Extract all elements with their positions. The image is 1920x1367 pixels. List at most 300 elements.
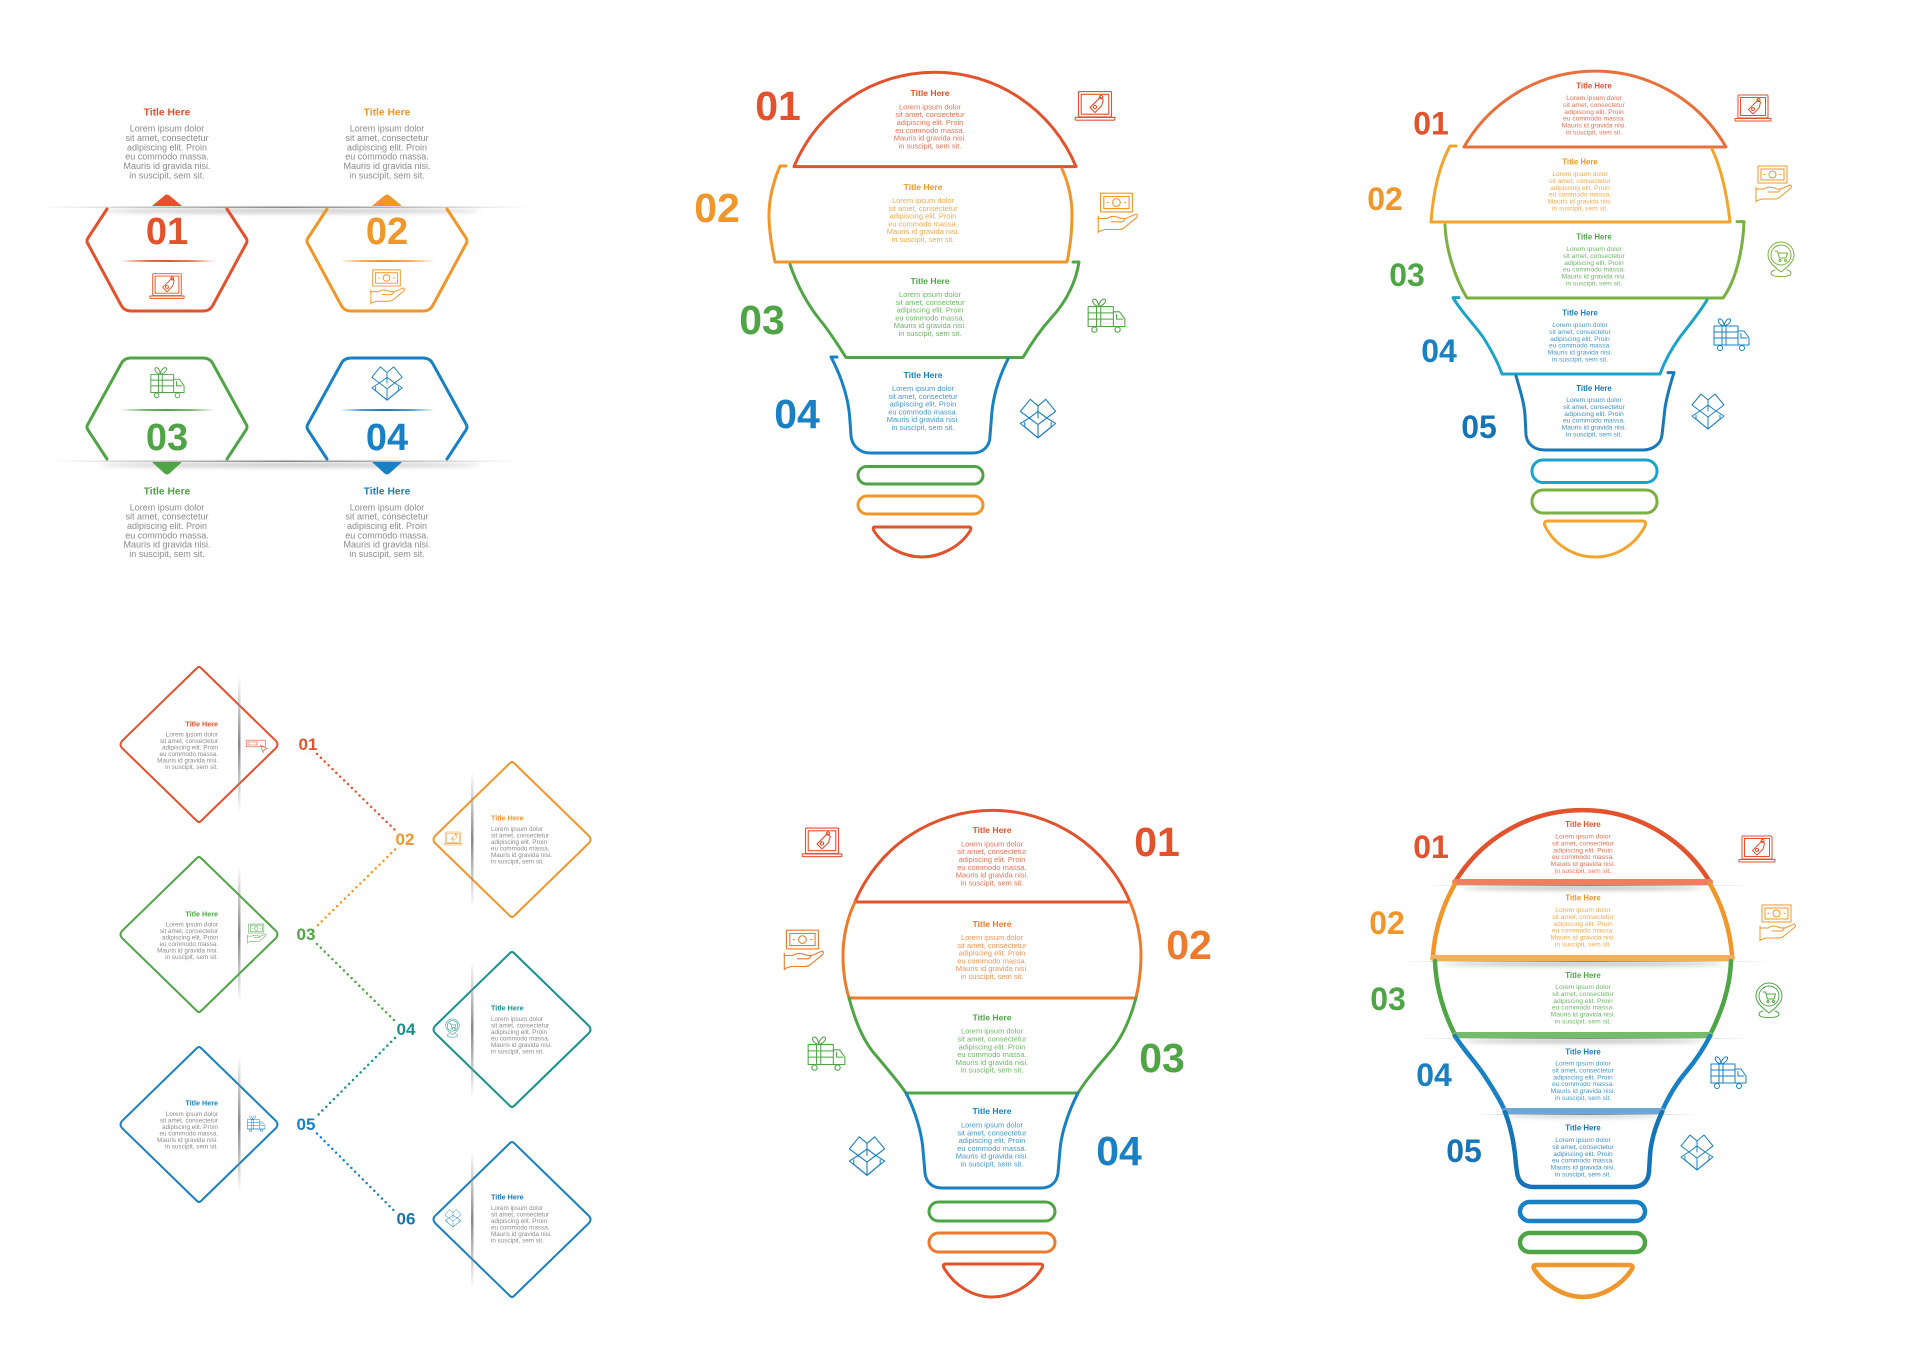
numbers: 05 bbox=[1446, 1133, 1482, 1169]
text block: 03 bbox=[894, 276, 966, 338]
text block: 04: adipiscing elit. Proin bbox=[890, 399, 956, 408]
bulb segment 03 bbox=[1435, 961, 1731, 1035]
text block: hexagon 02: adipiscing elit. Proin bbox=[347, 142, 427, 152]
icons bbox=[1681, 836, 1795, 1170]
text block: 01: Title Here bbox=[972, 825, 1012, 835]
diamond 04 bbox=[434, 952, 590, 1107]
panel: whole light bulb, four steps bbox=[784, 810, 1212, 1297]
text block: 01: in suscipit, sem sit. bbox=[1555, 868, 1611, 874]
text block: 01: in suscipit, sem sit. bbox=[961, 878, 1023, 887]
diamond 04: sit amet, consectetur bbox=[491, 1022, 549, 1029]
numbers: 04 bbox=[1096, 1128, 1142, 1174]
text block: 02: adipiscing elit. Proin bbox=[890, 211, 956, 220]
text block: 03: sit amet, consectetur bbox=[895, 297, 965, 306]
text block: 04: sit amet, consectetur bbox=[1549, 328, 1612, 335]
text block: 01: Lorem ipsum dolor bbox=[1555, 833, 1611, 840]
dotted connector 01-02 bbox=[317, 754, 395, 830]
text block: 05: Title Here bbox=[1576, 384, 1612, 393]
numbers: 03 bbox=[1139, 1035, 1185, 1081]
text block: 03: in suscipit, sem sit. bbox=[961, 1065, 1023, 1074]
text block: 03: Mauris id gravida nisi. bbox=[894, 321, 966, 330]
diamond 03: in suscipit, sem sit. bbox=[165, 954, 218, 960]
text block: 05: eu commodo massa. bbox=[1552, 1157, 1614, 1164]
text block: 03: adipiscing elit. Proin bbox=[897, 305, 963, 314]
bulb base pill: teal bbox=[1532, 460, 1657, 482]
hexagon 02: 02 bbox=[366, 211, 408, 253]
text block: 03: Title Here bbox=[1576, 232, 1612, 242]
icons bbox=[1020, 92, 1137, 438]
diamond 06 bbox=[434, 1142, 590, 1297]
icons bbox=[1692, 95, 1794, 429]
text block: 05: adipiscing elit. Proin bbox=[1564, 410, 1624, 417]
numbers: 03 bbox=[1389, 257, 1425, 293]
bulb tip bbox=[873, 527, 971, 557]
diamond 04: in suscipit, sem sit. bbox=[491, 1048, 544, 1055]
diamond 04: eu commodo massa. bbox=[491, 1035, 550, 1042]
text block: 04: in suscipit, sem sit. bbox=[1552, 356, 1608, 363]
numbers: 01 bbox=[755, 83, 801, 129]
diamond 04: adipiscing elit. Proin bbox=[491, 1028, 547, 1036]
bulb segment 03 bbox=[1445, 222, 1744, 298]
text block: 04: Lorem ipsum dolor bbox=[1555, 1060, 1611, 1067]
bulb segment 01 bbox=[855, 810, 1130, 902]
text block: hexagon 01 bbox=[123, 108, 211, 180]
text block: 02: adipiscing elit. Proin bbox=[1550, 184, 1610, 191]
text block: 04: Mauris id gravida nisi. bbox=[1548, 349, 1612, 356]
text block: 03: Title Here bbox=[972, 1013, 1012, 1023]
bulb segment 05 bbox=[1505, 1112, 1662, 1187]
diamond 05: Title Here bbox=[185, 1098, 218, 1108]
text block: 02: adipiscing elit. Proin bbox=[1553, 920, 1613, 927]
bulb segment 02 bbox=[1431, 146, 1730, 222]
text block: 04: eu commodo massa. bbox=[957, 1143, 1027, 1152]
diamond 06: Title Here bbox=[491, 1192, 524, 1202]
bulb base pill: orange bbox=[929, 1233, 1055, 1252]
text block: 04 bbox=[1548, 308, 1612, 363]
diamond 03 bbox=[120, 857, 278, 1012]
text block: 03: adipiscing elit. Proin bbox=[1564, 259, 1624, 266]
diamond 02: sit amet, consectetur bbox=[491, 832, 549, 839]
text block: 02: Lorem ipsum dolor bbox=[1555, 906, 1611, 914]
text block: hexagon 03: Mauris id gravida nisi. bbox=[123, 540, 211, 550]
dotted connector 05-06 bbox=[317, 1134, 395, 1212]
text block: 03: in suscipit, sem sit. bbox=[1555, 1018, 1611, 1025]
numbers: 05 bbox=[297, 1115, 315, 1134]
text block: 02 bbox=[1551, 894, 1615, 948]
text block: 01: Title Here bbox=[1565, 820, 1601, 829]
text block: 03: adipiscing elit. Proin bbox=[959, 1042, 1025, 1051]
text block: 03: in suscipit, sem sit. bbox=[1566, 280, 1622, 287]
text block: 03: sit amet, consectetur bbox=[1563, 252, 1626, 259]
text block: 03 bbox=[1551, 971, 1615, 1025]
text block: 01 bbox=[1551, 820, 1615, 874]
text block: 01 bbox=[1562, 82, 1626, 136]
numbers bbox=[1369, 829, 1482, 1169]
dotted connector 03-04 bbox=[317, 944, 395, 1021]
text block: 04: Lorem ipsum dolor bbox=[1552, 322, 1608, 328]
diamond 01 bbox=[120, 667, 278, 822]
diamond 02: eu commodo massa. bbox=[491, 845, 550, 852]
numbers: 06 bbox=[397, 1210, 415, 1228]
panel: diamond zigzag bbox=[120, 667, 590, 1297]
text block: 02 bbox=[956, 919, 1028, 980]
bulb segment 01 bbox=[794, 72, 1076, 167]
text block: 05: Mauris id gravida nisi. bbox=[1562, 424, 1626, 431]
text block: 02: Lorem ipsum dolor bbox=[892, 196, 955, 204]
text block: 01: Mauris id gravida nisi. bbox=[894, 133, 966, 142]
numbers: 02 bbox=[1166, 922, 1212, 968]
text block: 04: Lorem ipsum dolor bbox=[892, 384, 955, 392]
text block: 03: eu commodo massa. bbox=[1563, 266, 1625, 273]
text block: 01: Mauris id gravida nisi. bbox=[1551, 861, 1615, 868]
text block: 04: adipiscing elit. Proin bbox=[1553, 1074, 1613, 1081]
text block: 02: in suscipit, sem sit. bbox=[1552, 205, 1608, 212]
text block: 03 bbox=[1562, 232, 1626, 287]
text block: 02: Mauris id gravida nisi. bbox=[956, 964, 1028, 973]
text block: 03 bbox=[956, 1013, 1028, 1074]
hexagon 03: 03 bbox=[146, 417, 188, 459]
numbers: 03 bbox=[1370, 981, 1406, 1017]
text block: 04: Mauris id gravida nisi. bbox=[887, 415, 959, 424]
diamond 02: Lorem ipsum dolor bbox=[491, 826, 543, 832]
text block: 04: Title Here bbox=[1565, 1048, 1601, 1056]
text block: 01: eu commodo massa. bbox=[895, 125, 965, 134]
text block: hexagon 03: adipiscing elit. Proin bbox=[127, 521, 207, 531]
text block: 02: eu commodo massa. bbox=[1552, 927, 1614, 934]
text block: 01: adipiscing elit. Proin bbox=[1553, 847, 1613, 854]
text block: hexagon 03: sit amet, consectetur bbox=[125, 512, 209, 522]
numbers: 04 bbox=[1421, 333, 1457, 369]
text block: 02: sit amet, consectetur bbox=[888, 203, 958, 212]
text block: 04: in suscipit, sem sit. bbox=[892, 422, 954, 432]
numbers bbox=[1367, 106, 1497, 445]
text block: hexagon 04: Lorem ipsum dolor bbox=[350, 502, 424, 512]
text block: 02: in suscipit, sem sit. bbox=[892, 234, 954, 244]
text block: 04: adipiscing elit. Proin bbox=[959, 1136, 1025, 1145]
text block: 03: Mauris id gravida nisi. bbox=[1562, 273, 1626, 280]
numbers: 02 bbox=[396, 830, 414, 849]
text block: 05: sit amet, consectetur bbox=[1563, 403, 1626, 410]
text block: 01: Lorem ipsum dolor bbox=[1566, 94, 1622, 102]
text block: 04: sit amet, consectetur bbox=[957, 1128, 1027, 1137]
numbers: 04 bbox=[1416, 1057, 1452, 1093]
text block: 01: sit amet, consectetur bbox=[895, 110, 965, 119]
bulb segment 05 bbox=[1516, 373, 1674, 450]
text block: 04: in suscipit, sem sit. bbox=[1555, 1094, 1611, 1102]
text block: 05: eu commodo massa. bbox=[1563, 417, 1625, 424]
text block: hexagon 02: Title Here bbox=[364, 108, 411, 118]
text block: hexagon 04: eu commodo massa. bbox=[345, 530, 429, 540]
text block: 03: sit amet, consectetur bbox=[957, 1034, 1027, 1043]
text block: 02: Mauris id gravida nisi. bbox=[1548, 198, 1612, 205]
shadow bands bbox=[1400, 885, 1770, 1118]
text block: 02: Lorem ipsum dolor bbox=[1552, 170, 1608, 178]
bulb tip bbox=[1544, 521, 1646, 557]
text block: 04 bbox=[887, 370, 959, 432]
text block: 05 bbox=[1551, 1124, 1615, 1178]
text block: hexagon 02: eu commodo massa. bbox=[345, 152, 429, 162]
text block: 02 bbox=[887, 182, 959, 244]
text block: 02: in suscipit, sem sit. bbox=[1555, 941, 1611, 948]
text block: hexagon 04: Mauris id gravida nisi. bbox=[343, 540, 431, 550]
text block: 01: in suscipit, sem sit. bbox=[1566, 129, 1622, 136]
bulb segment 01 bbox=[1464, 71, 1726, 147]
text block: 03: in suscipit, sem sit. bbox=[899, 328, 961, 338]
text block: 04: in suscipit, sem sit. bbox=[961, 1159, 1023, 1168]
text block: 04: sit amet, consectetur bbox=[888, 391, 958, 400]
bulb segment 03 bbox=[849, 998, 1136, 1093]
text block: 01: eu commodo massa. bbox=[1563, 115, 1625, 122]
text block: 05: Title Here bbox=[1565, 1124, 1601, 1132]
bulb base pill: green bbox=[929, 1202, 1055, 1221]
text block: 04: Lorem ipsum dolor bbox=[961, 1120, 1024, 1129]
numbers: 03 bbox=[739, 297, 785, 343]
text block: hexagon 03 bbox=[123, 486, 211, 559]
diamond 03: eu commodo massa. bbox=[160, 940, 218, 948]
text block: 02: eu commodo massa. bbox=[888, 219, 958, 228]
text block: 01: sit amet, consectetur bbox=[1552, 840, 1615, 847]
text block: 02: eu commodo massa. bbox=[1549, 191, 1611, 198]
diamond 01: Lorem ipsum dolor bbox=[166, 731, 218, 738]
diamond 06: Lorem ipsum dolor bbox=[491, 1204, 543, 1212]
hexagon 02 bbox=[307, 194, 467, 311]
text block: 05: Mauris id gravida nisi. bbox=[1551, 1164, 1615, 1171]
numbers: 01 bbox=[1134, 819, 1180, 865]
diamond 01: Mauris id gravida nisi. bbox=[157, 757, 218, 764]
text block: 02: Mauris id gravida nisi. bbox=[1551, 934, 1615, 941]
text block: hexagon 01: eu commodo massa. bbox=[125, 152, 209, 162]
text block: 01: adipiscing elit. Proin bbox=[897, 118, 963, 126]
numbers: 03 bbox=[297, 925, 315, 944]
diamond 02: adipiscing elit. Proin bbox=[491, 838, 547, 846]
diamond 06: adipiscing elit. Proin bbox=[491, 1218, 547, 1224]
diamond 02: Title Here bbox=[491, 814, 524, 822]
text block: 03: eu commodo massa. bbox=[895, 313, 965, 322]
text block: 03: sit amet, consectetur bbox=[1552, 990, 1615, 997]
diamond 06: in suscipit, sem sit. bbox=[491, 1237, 544, 1244]
bulb segment 04 bbox=[906, 1093, 1078, 1188]
shadow band: bottom bbox=[50, 460, 520, 468]
diamond 06: eu commodo massa. bbox=[491, 1224, 550, 1231]
text block: 02: eu commodo massa. bbox=[957, 956, 1027, 965]
diamond 03: sit amet, consectetur bbox=[160, 928, 218, 934]
diamond 02: in suscipit, sem sit. bbox=[491, 858, 544, 865]
text block: 05 bbox=[1562, 384, 1626, 438]
text block: 01: Title Here bbox=[910, 88, 950, 98]
text block: 03: adipiscing elit. Proin bbox=[1553, 997, 1613, 1004]
text block: 04: Title Here bbox=[903, 370, 943, 380]
text block: 02: Title Here bbox=[972, 919, 1012, 929]
text block: 02: in suscipit, sem sit. bbox=[961, 972, 1023, 980]
diamond 05: Lorem ipsum dolor bbox=[166, 1110, 218, 1118]
diamond 05: eu commodo massa. bbox=[160, 1130, 218, 1137]
bulb segment 04 bbox=[831, 357, 1008, 453]
panel: hexagon infographic bbox=[40, 108, 530, 559]
diamond 03: Title Here bbox=[185, 910, 218, 918]
bulb base pill: green bbox=[858, 466, 983, 484]
text block: 04: adipiscing elit. Proin bbox=[1550, 335, 1610, 342]
text block: 05: in suscipit, sem sit. bbox=[1566, 431, 1622, 438]
text block: 02: Mauris id gravida nisi. bbox=[887, 227, 959, 236]
text block: 03: Mauris id gravida nisi. bbox=[1551, 1011, 1615, 1018]
text block: 05: in suscipit, sem sit. bbox=[1555, 1171, 1611, 1178]
text block: 03: Lorem ipsum dolor bbox=[961, 1026, 1024, 1035]
numbers bbox=[297, 735, 416, 1228]
text block: 01: Mauris id gravida nisi. bbox=[1562, 122, 1626, 129]
text block: 01: adipiscing elit. Proin bbox=[1564, 108, 1624, 115]
diamond 01: eu commodo massa. bbox=[160, 750, 218, 758]
text block: hexagon 01: adipiscing elit. Proin bbox=[127, 142, 207, 152]
panel: split light bulb, four steps bbox=[694, 72, 1137, 557]
text block: 01: sit amet, consectetur bbox=[957, 847, 1027, 856]
text block: 04: Title Here bbox=[1562, 308, 1598, 318]
text block: hexagon 02 bbox=[343, 108, 431, 180]
panel: light bulb with shadow bands, five steps bbox=[1369, 810, 1795, 1297]
text block: 01: adipiscing elit. Proin bbox=[959, 854, 1025, 864]
text block: 05: sit amet, consectetur bbox=[1552, 1143, 1615, 1150]
text block: 02: adipiscing elit. Proin bbox=[959, 948, 1025, 957]
numbers: 04 bbox=[774, 391, 820, 437]
text block: hexagon 04: sit amet, consectetur bbox=[345, 512, 429, 522]
hexagon 04: 04 bbox=[366, 417, 408, 459]
text block: 01: eu commodo massa. bbox=[957, 862, 1027, 871]
numbers: 01 bbox=[299, 735, 317, 754]
text block: hexagon 01: in suscipit, sem sit. bbox=[129, 170, 205, 180]
text block: 04: Mauris id gravida nisi. bbox=[956, 1151, 1028, 1160]
text block: 01: sit amet, consectetur bbox=[1563, 101, 1626, 108]
text block: 04: Mauris id gravida nisi. bbox=[1551, 1088, 1615, 1095]
diamond 06: Mauris id gravida nisi. bbox=[491, 1230, 552, 1238]
text block: hexagon 01: Mauris id gravida nisi. bbox=[123, 161, 211, 171]
numbers: 05 bbox=[1461, 409, 1497, 445]
text block: 04: sit amet, consectetur bbox=[1552, 1067, 1615, 1074]
diamond 02 bbox=[434, 762, 590, 917]
diamond 05: adipiscing elit. Proin bbox=[162, 1124, 218, 1130]
hexagon 01 bbox=[87, 194, 247, 311]
numbers: 02 bbox=[1369, 905, 1405, 941]
numbers: 01 bbox=[1413, 106, 1449, 142]
diamond 06: sit amet, consectetur bbox=[491, 1211, 549, 1218]
panel: split light bulb, five steps bbox=[1367, 71, 1794, 557]
text block: hexagon 03: Lorem ipsum dolor bbox=[130, 502, 204, 512]
text block: hexagon 03: in suscipit, sem sit. bbox=[129, 549, 205, 559]
text block: 04: eu commodo massa. bbox=[1549, 342, 1611, 349]
numbers bbox=[694, 83, 820, 437]
diamond 01: adipiscing elit. Proin bbox=[162, 744, 218, 751]
diamond 04: Title Here bbox=[491, 1004, 524, 1012]
diamond 03: adipiscing elit. Proin bbox=[162, 934, 218, 941]
bulb segment 02 bbox=[1433, 884, 1732, 958]
hexagon 01: 01 bbox=[146, 211, 188, 253]
numbers: 01 bbox=[1413, 829, 1449, 865]
diamond 01: in suscipit, sem sit. bbox=[165, 764, 218, 770]
text block: 04: eu commodo massa. bbox=[888, 407, 958, 416]
icons bbox=[784, 828, 885, 1175]
text block: 02: Title Here bbox=[1562, 158, 1598, 166]
diamond 02: Mauris id gravida nisi. bbox=[491, 852, 552, 858]
diamond 05: in suscipit, sem sit. bbox=[165, 1143, 218, 1150]
text block: 05: Lorem ipsum dolor bbox=[1566, 396, 1622, 404]
text block: hexagon 03: eu commodo massa. bbox=[125, 530, 209, 540]
diamond 03: Lorem ipsum dolor bbox=[166, 921, 218, 928]
text block: hexagon 04: Title Here bbox=[364, 486, 411, 498]
diamond 05: Mauris id gravida nisi. bbox=[157, 1136, 218, 1144]
text block: 04 bbox=[956, 1106, 1028, 1168]
text block: 03: eu commodo massa. bbox=[1552, 1004, 1614, 1011]
text block: hexagon 01: Lorem ipsum dolor bbox=[130, 124, 204, 134]
text block: 02: sit amet, consectetur bbox=[1549, 177, 1612, 184]
bulb segment 04 bbox=[1455, 1036, 1710, 1111]
text block: 03: Title Here bbox=[910, 276, 950, 286]
text block: hexagon 02: in suscipit, sem sit. bbox=[349, 170, 425, 180]
bulb segment 04 bbox=[1453, 298, 1707, 374]
text block: 02: sit amet, consectetur bbox=[1552, 913, 1615, 920]
diamond 01: sit amet, consectetur bbox=[160, 738, 218, 744]
bulb segment 01 bbox=[1455, 810, 1710, 882]
text block: hexagon 01: Title Here bbox=[144, 108, 191, 118]
numbers: 02 bbox=[694, 185, 740, 231]
bulb segment 02 bbox=[843, 902, 1141, 998]
text block: 01: in suscipit, sem sit. bbox=[899, 141, 961, 150]
text block: 01: Lorem ipsum dolor bbox=[961, 839, 1024, 848]
text block: 03: Lorem ipsum dolor bbox=[1555, 984, 1611, 990]
numbers bbox=[1096, 819, 1212, 1174]
text block: hexagon 04: adipiscing elit. Proin bbox=[347, 521, 427, 531]
text block: 03: Mauris id gravida nisi. bbox=[956, 1057, 1028, 1066]
text block: 02: Title Here bbox=[1565, 894, 1601, 902]
text block: 01 bbox=[956, 825, 1028, 887]
text block: hexagon 01: sit amet, consectetur bbox=[125, 133, 209, 143]
text block: 01: Mauris id gravida nisi. bbox=[956, 870, 1028, 879]
numbers: 02 bbox=[1367, 181, 1403, 217]
bulb tip bbox=[943, 1264, 1043, 1297]
text block: hexagon 04: in suscipit, sem sit. bbox=[349, 549, 425, 559]
text block: 01: eu commodo massa. bbox=[1552, 854, 1614, 861]
text block: 01: Title Here bbox=[1576, 82, 1612, 90]
text block: 05: adipiscing elit. Proin bbox=[1553, 1150, 1613, 1157]
text block: hexagon 02: Mauris id gravida nisi. bbox=[343, 161, 431, 171]
bulb base pill: orange bbox=[858, 496, 983, 514]
text block: 04 bbox=[1551, 1048, 1615, 1102]
numbers: 04 bbox=[397, 1020, 416, 1039]
text block: 02: sit amet, consectetur bbox=[957, 940, 1027, 949]
bulb segment 03 bbox=[790, 262, 1079, 358]
bulb segment 02 bbox=[769, 166, 1072, 262]
text block: 05: Lorem ipsum dolor bbox=[1555, 1136, 1611, 1144]
bulb tip bbox=[1533, 1265, 1633, 1297]
text block: 02: Lorem ipsum dolor bbox=[961, 932, 1024, 942]
text block: 04: Title Here bbox=[972, 1106, 1012, 1116]
text block: 01 bbox=[894, 88, 966, 150]
text block: 02: Title Here bbox=[903, 182, 943, 192]
text block: hexagon 02: Lorem ipsum dolor bbox=[350, 124, 424, 134]
text block: hexagon 04 bbox=[343, 486, 431, 559]
text block: 03: Title Here bbox=[1565, 971, 1601, 980]
diamond 05: sit amet, consectetur bbox=[160, 1117, 218, 1124]
diamond 04: Lorem ipsum dolor bbox=[491, 1016, 543, 1022]
text block: 02 bbox=[1548, 158, 1612, 212]
diamond 04: Mauris id gravida nisi. bbox=[491, 1042, 552, 1048]
diamond 05 bbox=[120, 1047, 278, 1202]
text block: 04: eu commodo massa. bbox=[1552, 1081, 1614, 1088]
dotted connector 02-03 bbox=[317, 850, 395, 926]
hexagon 04 bbox=[307, 358, 467, 474]
text block: 03: eu commodo massa. bbox=[957, 1050, 1027, 1059]
dotted connector 04-05 bbox=[317, 1038, 395, 1116]
text block: 03: Lorem ipsum dolor bbox=[1566, 246, 1622, 252]
text block: 03: Lorem ipsum dolor bbox=[899, 290, 962, 298]
bulb base pill: blue bbox=[1520, 1202, 1645, 1221]
